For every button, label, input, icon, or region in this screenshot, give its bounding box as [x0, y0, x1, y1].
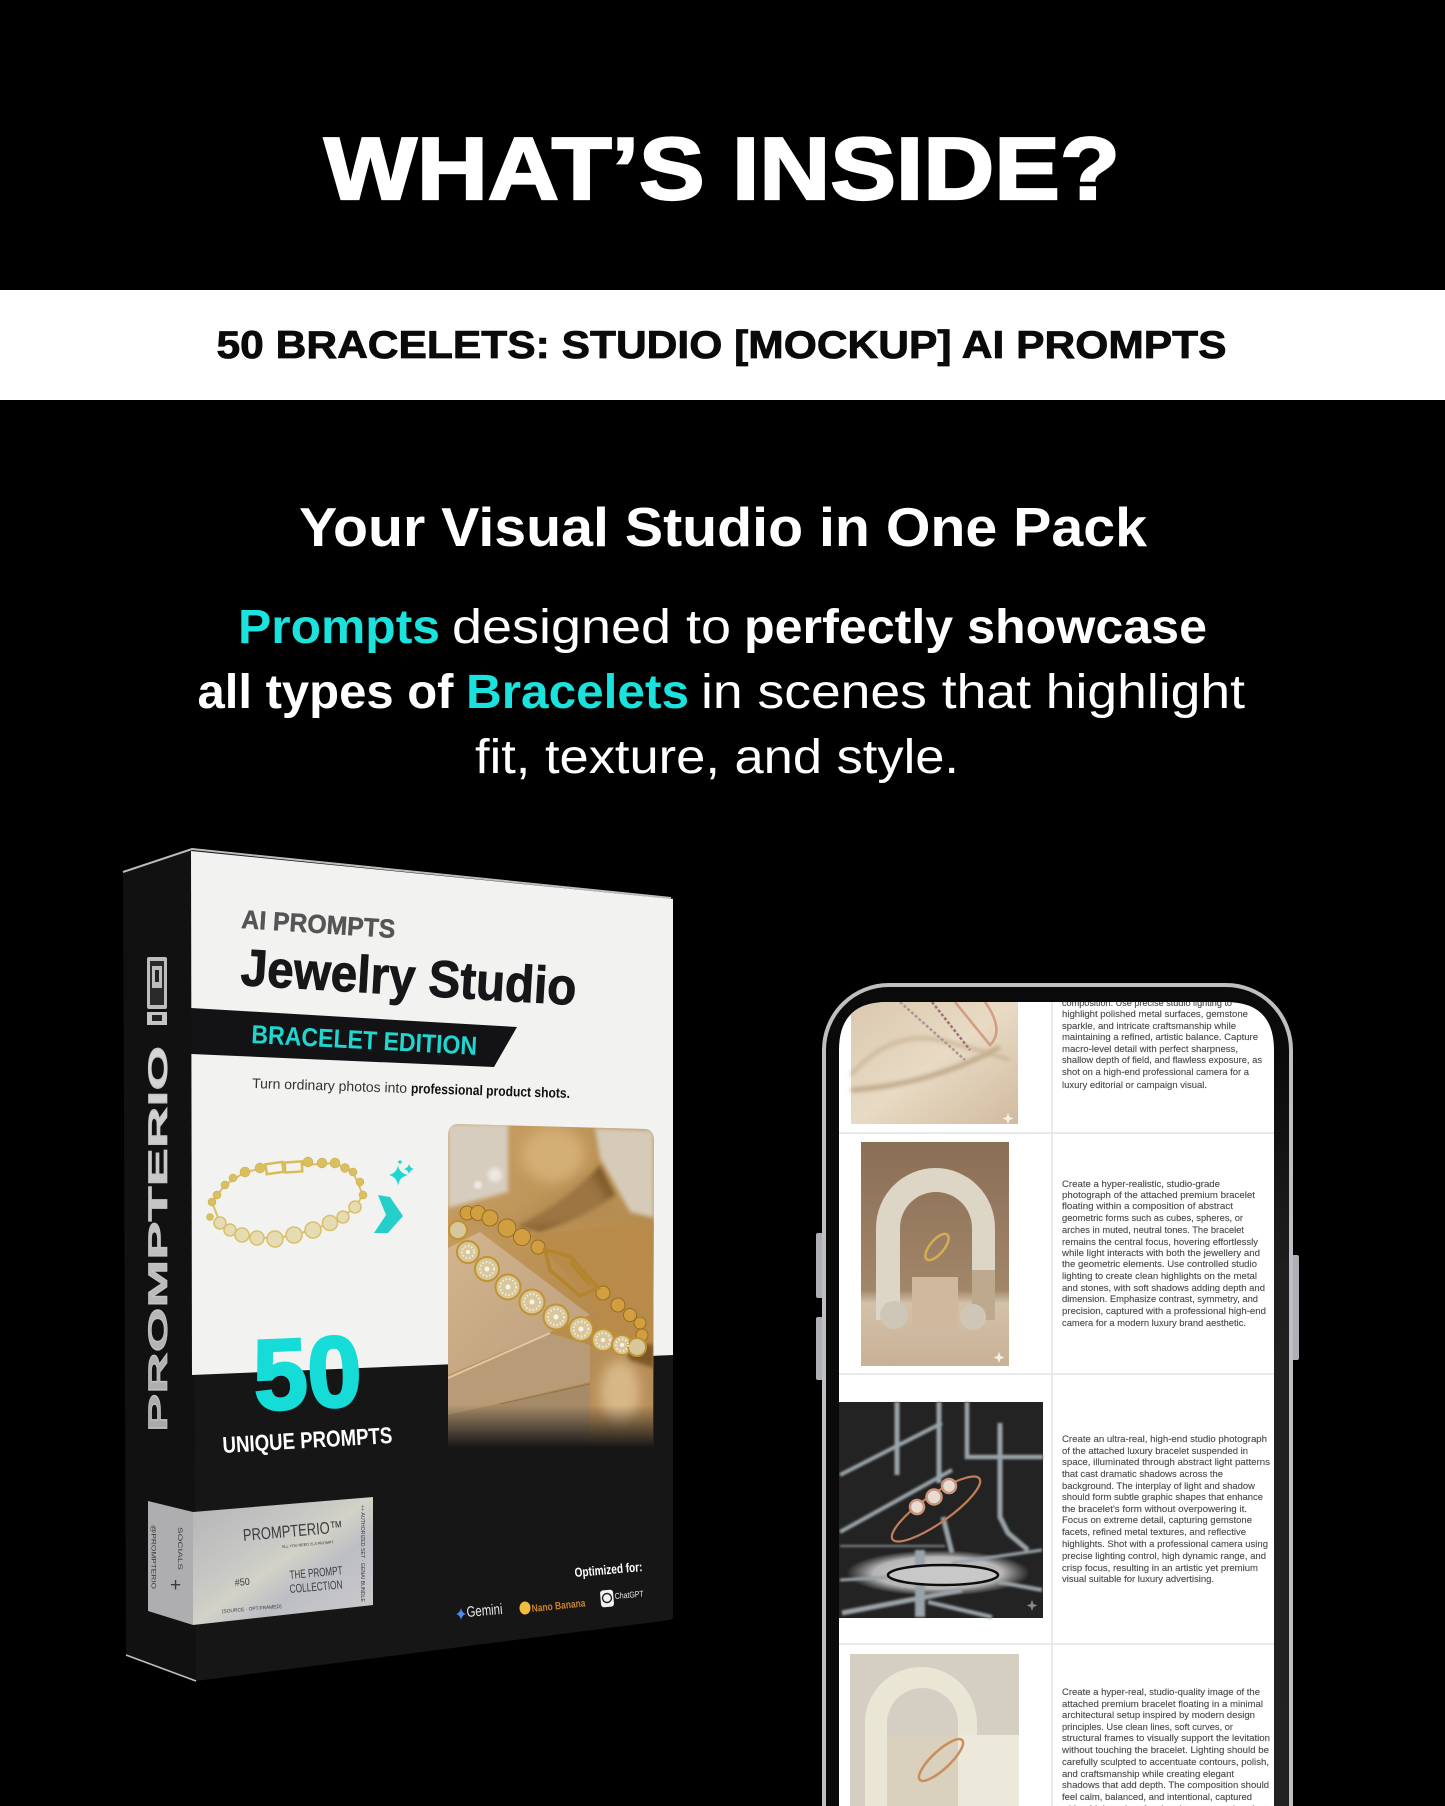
description text block: fit, texture, and style. [475, 731, 959, 784]
label text: ++ AUTHORIZED SET · GENAI BUNDLE [359, 1505, 365, 1603]
prompt text 4 [1061, 1686, 1270, 1806]
prompt text 1: shallow depth of field, and flawless exposure, as [1062, 1054, 1262, 1065]
icon: chevron arrow [374, 1195, 403, 1233]
subtitle band [0, 290, 1445, 400]
chatgpt logo: ChatGPT [614, 1589, 644, 1601]
prompt text 1: macro-level detail with perfect sharpness, [1062, 1043, 1238, 1054]
heading: your visual studio: Your Visual Studio in One Pack [299, 496, 1147, 558]
icon: spine logo [147, 957, 167, 1025]
prompt text 3: that cast dramatic shadows across the [1062, 1468, 1223, 1479]
label: ai prompts: AI PROMPTS [241, 904, 396, 944]
box front white panel [191, 851, 673, 1375]
prompt text 2: geometric forms such as cubes, spheres, or [1062, 1212, 1243, 1223]
box top edge highlight [123, 849, 671, 898]
label text: ALL YOU NEED IS A PROMPT [282, 1539, 334, 1549]
label side text: @PROMPTERIO [150, 1525, 156, 1589]
product bracelet [206, 1157, 367, 1247]
prompt text 2: dimension. Emphasize contrast, symmetry, and [1062, 1293, 1258, 1304]
prompt text 1: composition. Use precise studio lighting to [1062, 997, 1232, 1008]
prompt text 4: feel calm, balanced, and intentional, captured [1062, 1791, 1252, 1802]
prompt text 3: visual suitable for luxury advertising. [1062, 1573, 1214, 1584]
prompt text 2: arches in muted, neutral tones. The bracelet [1062, 1224, 1244, 1235]
prompt text 4: architectural setup inspired by modern design [1062, 1709, 1255, 1720]
label: jewelry studio: Jewelry Studio [239, 939, 578, 1017]
prompt text 2 [1061, 1178, 1266, 1328]
optimized for: Optimized for: [574, 1559, 643, 1580]
prompt text 4: and craftsmanship while creating elegant [1062, 1768, 1234, 1779]
prompt text 4: attached premium bracelet floating in a minimal [1062, 1698, 1263, 1709]
edition banner [191, 1008, 517, 1067]
label text [222, 1505, 365, 1615]
tagline: professional product shots. [411, 1080, 570, 1101]
prompt text 4: shadows that add depth. The composition should [1062, 1779, 1269, 1790]
label text: (SOURCE · OPT.FRAMED) [222, 1604, 282, 1615]
edition text: BRACELET EDITION [251, 1019, 478, 1061]
phone body [824, 985, 1291, 1806]
photo 1: bracelets on beige [851, 1000, 1018, 1124]
box bottom edge highlight [126, 1655, 196, 1681]
unique prompts text: UNIQUE PROMPTS [222, 1422, 393, 1458]
prompt text 3: Focus on extreme detail, capturing gemstone [1062, 1514, 1252, 1525]
prompt text 3: should form subtle graphic shapes that enhance [1062, 1491, 1263, 1502]
prompt text 4: structural frames to visually support the levitation [1062, 1732, 1270, 1743]
prompt text 3: the bracelet's form without overpowering it. [1062, 1503, 1247, 1514]
prompt text 2: Create a hyper-realistic, studio-grade [1062, 1178, 1220, 1189]
prompt text 3: space, illuminated through abstract light patterns [1062, 1456, 1270, 1467]
prompt text 2: photograph of the attached premium bracelet [1062, 1189, 1255, 1200]
gemini logo [456, 1601, 503, 1621]
prompt text 3: Create an ultra-real, high-end studio photograph [1062, 1433, 1267, 1444]
prompt text 2: floating within a composition of abstract [1062, 1200, 1233, 1211]
prompt text 4: principles. Use clean lines, soft curves, or [1062, 1721, 1233, 1732]
box front lower black panel [192, 848, 673, 1681]
prompt text 1: highlight polished metal surfaces, gemstone [1062, 1008, 1248, 1019]
prompt text 3: facets, refined metal textures, and reflective [1062, 1526, 1246, 1537]
prompt text 2: while light interacts with both the jewellery and [1061, 1247, 1260, 1258]
label side text: + [170, 1575, 181, 1596]
photo bracelet beads [460, 1206, 648, 1341]
prompt text 1: shot on a high-end professional camera for a [1062, 1066, 1250, 1077]
prompt text 1: luxury editorial or campaign visual. [1062, 1079, 1207, 1090]
photo 3: rose gold bracelet on dark [839, 1402, 1043, 1618]
label side text: SOCIALS [176, 1527, 182, 1570]
photo bracelet stones [449, 1221, 646, 1356]
prompt text 1 [1062, 997, 1262, 1090]
label text: PROMPTERIO™ [242, 1517, 343, 1545]
prompt text 2: remains the central focus, hovering effortlessly [1062, 1236, 1258, 1247]
prompt text 2: lighting to create clean highlights on the metal [1062, 1270, 1257, 1281]
label side text [150, 1525, 182, 1596]
tagline [252, 1075, 570, 1101]
tagline: Turn ordinary photos into [252, 1075, 408, 1096]
label text: #50 [234, 1577, 251, 1589]
prompt text 3: precise lighting control, high dynamic range, and [1062, 1550, 1266, 1561]
photo 4: rose bracelet with cream arch [850, 1654, 1019, 1806]
description text block [198, 601, 1245, 784]
label text: COLLECTION [289, 1577, 343, 1596]
product box [123, 848, 673, 1681]
nano banana logo [520, 1597, 586, 1615]
prompt text 2: precision, captured with a professional high-end [1062, 1305, 1266, 1316]
prompt text 4: Create a hyper-real, studio-quality image of the [1062, 1686, 1260, 1697]
description text block: designed to [452, 601, 731, 654]
holographic label [148, 1497, 373, 1625]
subtitle text: 50 BRACELETS: STUDIO [MOCKUP] AI PROMPTS [216, 324, 1226, 367]
prompt text 3: crisp focus, resulting in an artistic yet premium [1062, 1562, 1258, 1573]
big number 50: 50 [251, 1315, 364, 1432]
table dividers [839, 1002, 1274, 1806]
title: WHAT’S INSIDE? [324, 119, 1120, 218]
prompt text 4: without touching the bracelet. Lighting should be [1061, 1744, 1269, 1755]
phone screen [839, 997, 1274, 1806]
prompt text 3: background. The interplay of light and shadow [1062, 1480, 1255, 1491]
photo 2: arch with gold bracelet [861, 1142, 1009, 1366]
phone side buttons [816, 1233, 1299, 1380]
chatgpt logo [600, 1589, 644, 1608]
spine brand name: PROMPTERIO [143, 1046, 173, 1432]
photo bracelet clasp [545, 1250, 598, 1296]
phone mockup [816, 985, 1299, 1806]
description text block: Prompts [238, 601, 440, 654]
prompt text 2: the geometric elements. Use controlled studio [1062, 1258, 1257, 1269]
description text block: all types of [198, 666, 455, 719]
description text block: Bracelets [466, 666, 689, 719]
label text: THE PROMPT [289, 1563, 344, 1582]
description text block: in scenes that highlight [701, 666, 1245, 719]
gemini logo: Gemini [466, 1601, 503, 1621]
prompt text 2: camera for a modern luxury brand aesthetic. [1062, 1317, 1246, 1328]
phone right bezel tint [1274, 1050, 1289, 1806]
prompt text 3: of the attached luxury bracelet suspended in [1062, 1445, 1248, 1456]
prompt text 2: and stones, with soft shadows adding depth and [1062, 1282, 1265, 1293]
box photo: gold bracelet on satin [448, 1124, 654, 1464]
icon: sparkle [389, 1159, 414, 1186]
prompt text 3: highlights. Shot with a professional camera using [1062, 1538, 1268, 1549]
prompt text 1: maintaining a refined, artistic balance. Capture [1062, 1031, 1258, 1042]
box surfaces [448, 1232, 590, 1375]
nano banana logo: Nano Banana [531, 1597, 586, 1615]
description text block: perfectly showcase [744, 601, 1207, 654]
box spine [123, 848, 196, 1681]
prompt text 3 [1062, 1433, 1270, 1584]
prompt text 1: sparkle, and intricate craftsmanship while [1062, 1020, 1236, 1031]
prompt text 4: carefully sculpted to accentuate contours, polish, [1062, 1756, 1269, 1767]
